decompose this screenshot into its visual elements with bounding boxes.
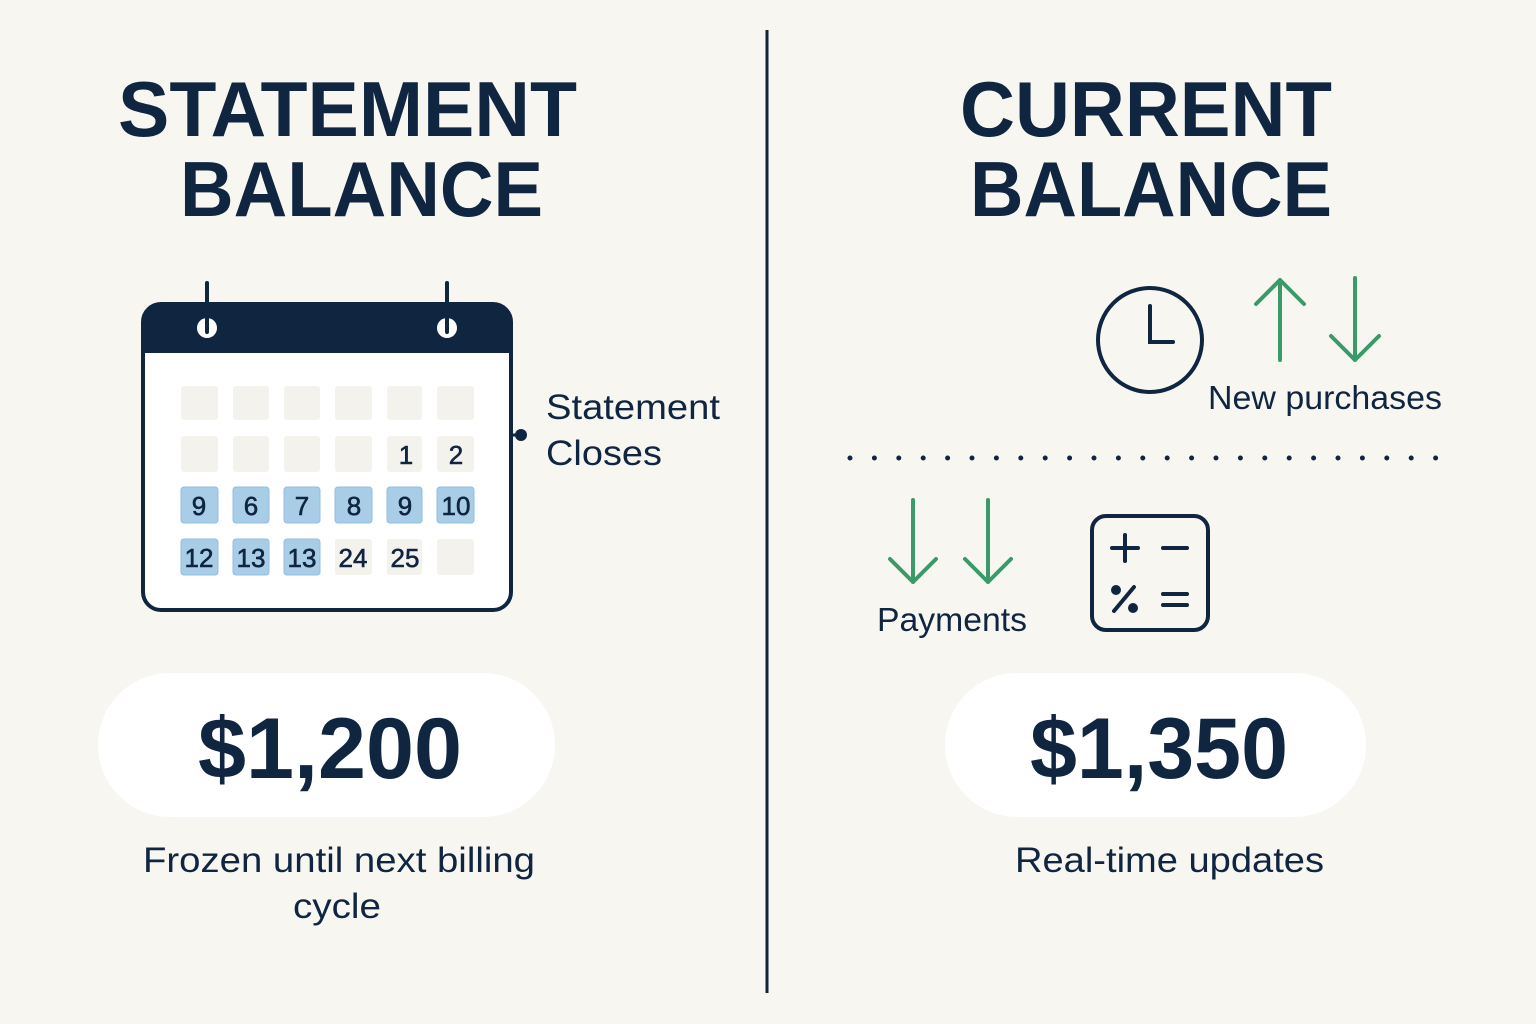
pill: statement amount: $1,200 <box>198 701 462 797</box>
icon: calendar: 8 <box>347 491 361 521</box>
caption: frozen <box>143 841 535 926</box>
caption: real-time: Real-time updates <box>1015 841 1324 880</box>
icon: clock <box>1098 288 1202 392</box>
title: statement balance <box>118 65 577 233</box>
pill: current amount <box>945 673 1366 817</box>
label: statement closes <box>546 388 720 473</box>
icon: calendar: 24 <box>339 543 367 573</box>
icon: calendar <box>143 283 527 610</box>
pill: statement amount <box>98 673 555 817</box>
title: current balance: CURRENT <box>960 65 1332 153</box>
icon: calendar: 7 <box>295 491 309 521</box>
icon: calendar: 13 <box>288 543 316 573</box>
icon: calendar: 25 <box>391 543 419 573</box>
pill: current amount: $1,350 <box>1030 701 1288 797</box>
icon: calendar: 13 <box>237 543 265 573</box>
icon: up/down arrows <box>1256 278 1379 360</box>
label: payments: Payments <box>877 601 1027 638</box>
title: statement balance: STATEMENT <box>118 65 577 153</box>
title: current balance: BALANCE <box>970 145 1332 233</box>
caption: frozen: Frozen until next billing <box>143 841 535 880</box>
title: statement balance: BALANCE <box>180 145 543 233</box>
icon: payment arrows <box>890 500 1011 582</box>
icon: calendar: 6 <box>244 491 258 521</box>
label: statement closes: Statement <box>546 388 720 427</box>
icon: calendar: 12 <box>185 543 213 573</box>
icon: calendar: 9 <box>192 491 206 521</box>
icon: calculator <box>1092 516 1208 630</box>
icon: calendar: 1 <box>399 440 413 470</box>
label: statement closes: Closes <box>546 434 662 473</box>
icon: calendar: 10 <box>442 491 470 521</box>
icon: calendar: 2 <box>449 440 463 470</box>
icon: calendar: 9 <box>398 491 412 521</box>
caption: frozen: cycle <box>293 887 381 926</box>
title: current balance <box>960 65 1332 233</box>
label: new purchases: New purchases <box>1208 379 1442 416</box>
